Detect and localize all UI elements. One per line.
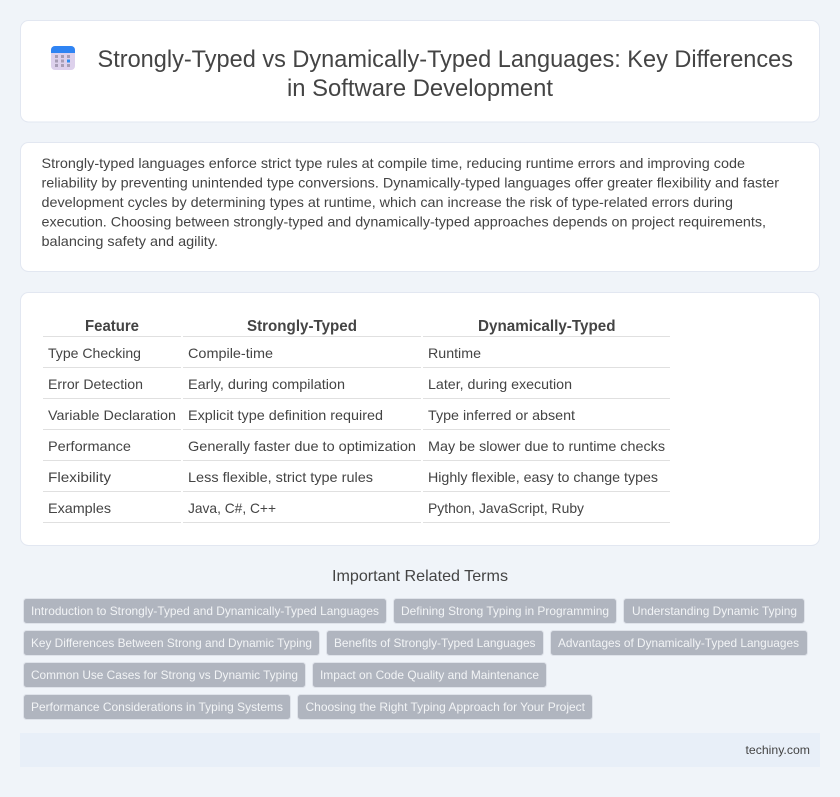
- tag: [326, 630, 544, 656]
- row: type checking: [48, 345, 481, 361]
- panel: comparison table: [20, 292, 820, 546]
- row: variable declaration: Type inferred or absent: [428, 407, 575, 423]
- row: flexibility: Highly flexible, easy to change types: [428, 469, 658, 485]
- related terms tags: [24, 598, 808, 720]
- row: performance: May be slower due to runtime checks: [428, 438, 665, 454]
- panel: introduction paragraph: development cycles by determining types at runtime, which can increase the risk of type-related errors during: [42, 194, 733, 210]
- heading: important related terms: Important Related Terms: [332, 568, 508, 585]
- tag: Benefits of Strongly-Typed Languages: [334, 636, 536, 650]
- table header: Strongly-Typed: [247, 318, 357, 335]
- panel: introduction paragraph: Strongly-typed languages enforce strict type rules at compile time, reducing runtime errors and improving code: [42, 155, 745, 171]
- tag: [24, 630, 320, 656]
- icon: calendar: [51, 46, 75, 70]
- footer: [20, 733, 820, 767]
- tag: Advantages of Dynamically-Typed Languages: [558, 636, 799, 650]
- row: error detection: Error Detection: [48, 376, 143, 392]
- tag: Understanding Dynamic Typing: [632, 604, 797, 618]
- tag: Introduction to Strongly-Typed and Dynamically-Typed Languages: [31, 604, 379, 618]
- title: in Software Development: [287, 75, 553, 102]
- panel: introduction paragraph: reliability by preventing unintended type conversions. Dynamically-typed languages offer greater flexibility and faster: [42, 174, 779, 190]
- tag: Common Use Cases for Strong vs Dynamic Typing: [31, 668, 298, 682]
- row: examples: [48, 500, 584, 516]
- title: Strongly-Typed vs Dynamically-Typed Languages: Key Differences: [98, 46, 793, 73]
- row: flexibility: Flexibility: [48, 469, 111, 485]
- row: examples: Java, C#, C++: [188, 500, 276, 516]
- row: type checking: Type Checking: [48, 345, 141, 361]
- tag: Performance Considerations in Typing Systems: [31, 700, 283, 714]
- row: flexibility: [48, 469, 658, 485]
- row: performance: Performance: [48, 438, 131, 454]
- row: examples: Python, JavaScript, Ruby: [428, 500, 584, 516]
- row: error detection: [48, 376, 572, 392]
- header card: [20, 20, 820, 122]
- row: type checking: Compile-time: [188, 345, 273, 361]
- row: examples: Examples: [48, 500, 111, 516]
- tag: [298, 694, 592, 720]
- title: [98, 46, 793, 102]
- tag: Key Differences Between Strong and Dynamic Typing: [31, 636, 312, 650]
- tag: [24, 694, 290, 720]
- row: error detection: Early, during compilation: [188, 376, 345, 392]
- tag: [24, 598, 386, 624]
- table header: Dynamically-Typed: [478, 318, 616, 335]
- tag: [394, 598, 616, 624]
- row: error detection: Later, during execution: [428, 376, 572, 392]
- table header: [85, 318, 616, 335]
- tag: Choosing the Right Typing Approach for Your Project: [306, 700, 586, 714]
- panel: introduction paragraph: execution. Choosing between strongly-typed and dynamically-typed approaches depends on project requirements,: [42, 214, 766, 230]
- row: flexibility: Less flexible, strict type rules: [188, 469, 373, 485]
- tag: [24, 662, 306, 688]
- row: type checking: Runtime: [428, 345, 481, 361]
- tag: [624, 598, 804, 624]
- row: performance: [48, 438, 665, 454]
- tag: Impact on Code Quality and Maintenance: [320, 668, 539, 682]
- tag: [312, 662, 546, 688]
- row: variable declaration: Explicit type definition required: [188, 407, 383, 423]
- tag: [550, 630, 808, 656]
- row: performance: Generally faster due to optimization: [188, 438, 416, 454]
- table header: Feature: [85, 318, 139, 335]
- footer: techiny.com: [746, 743, 810, 757]
- row: variable declaration: [48, 407, 575, 423]
- tag: Defining Strong Typing in Programming: [401, 604, 609, 618]
- panel: introduction paragraph: balancing safety and agility.: [42, 233, 218, 249]
- panel: introduction paragraph: [20, 142, 820, 272]
- row: variable declaration: Variable Declaration: [48, 407, 176, 423]
